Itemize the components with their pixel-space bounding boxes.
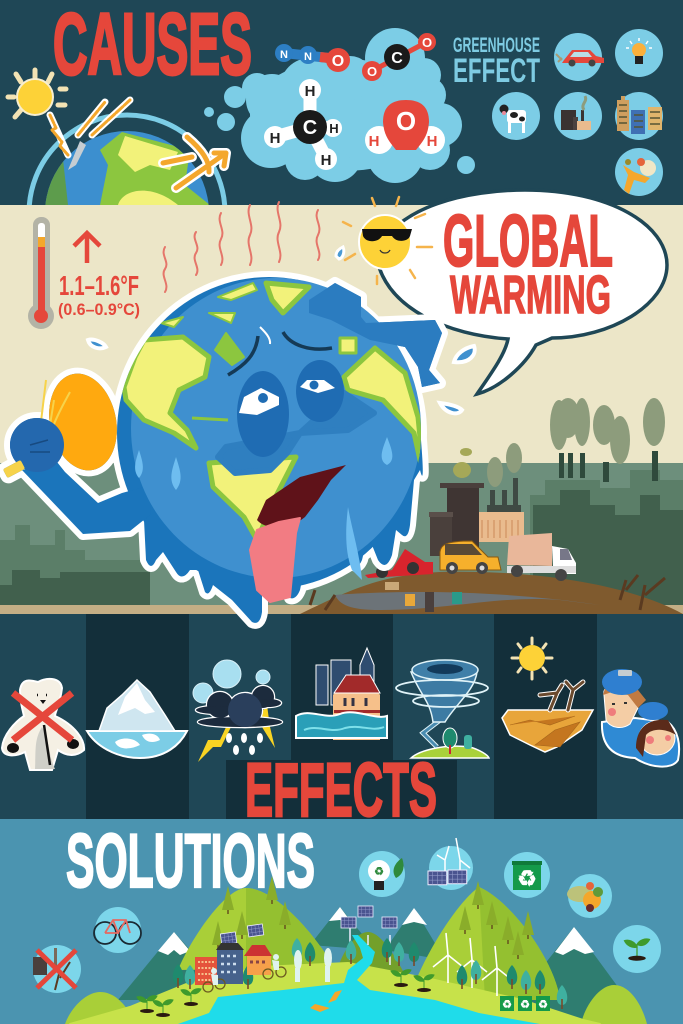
molecule: nitrous oxide: O <box>332 53 344 70</box>
molecule: water <box>365 100 445 154</box>
distant factories and smoke <box>453 398 665 487</box>
hills <box>65 887 647 1024</box>
molecule: water: H <box>427 133 437 150</box>
icon: eco bulb <box>359 851 405 897</box>
recycling bins <box>500 996 550 1011</box>
icon: food <box>567 874 612 918</box>
icon: reflected heat arrows <box>163 137 226 188</box>
fish <box>310 990 342 1012</box>
mountains <box>118 907 640 1024</box>
molecule: carbon dioxide <box>362 33 436 81</box>
icon: second solar panel <box>448 870 467 884</box>
text: temperature rise <box>58 270 140 319</box>
icon: thermometer <box>28 217 54 329</box>
sweat drops around earth <box>88 340 475 413</box>
icon: city buildings <box>615 92 663 140</box>
recycling bins: ♻ <box>520 999 530 1011</box>
icon: light bulb <box>615 29 663 77</box>
sweat on earth <box>135 437 392 580</box>
trees <box>173 938 567 1009</box>
icon: recycling bin: ♻ <box>517 866 537 891</box>
panel: solutions background <box>0 819 683 1024</box>
icon: recycling bin <box>504 852 550 898</box>
recycling bins: ♻ <box>538 999 548 1011</box>
molecule: methane: H <box>305 83 315 100</box>
right arm shade <box>309 283 442 387</box>
effect: storm <box>193 660 282 762</box>
panel: global warming sky <box>0 205 683 465</box>
solar panels <box>220 906 398 965</box>
icon: seedling <box>613 925 661 973</box>
effect: sick people <box>602 669 679 767</box>
icon: food and hand <box>615 148 663 196</box>
seedlings <box>137 970 434 1017</box>
heading: greenhouse effect <box>453 34 540 90</box>
left hand with fan <box>3 367 125 478</box>
effect: drought <box>502 638 593 752</box>
recycling bins: ♻ <box>502 999 512 1011</box>
molecule: nitrous oxide: N <box>304 51 312 63</box>
illustration: factory and vehicles on mound <box>300 478 683 614</box>
earth mouth <box>257 465 346 527</box>
molecule: methane: H <box>270 130 280 147</box>
panel: effects background stripes <box>0 614 683 819</box>
icon: car <box>554 33 604 81</box>
icon: up arrow <box>74 233 100 263</box>
panel: causes background <box>0 0 683 205</box>
icon: bicycle <box>94 907 141 953</box>
heading: greenhouse effect: EFFECT <box>453 52 540 90</box>
molecule: methane: C <box>303 117 317 139</box>
molecule: nitrous oxide: N <box>280 49 288 61</box>
text: temperature rise: (0.6–0.9°C) <box>58 300 140 319</box>
ground <box>70 963 600 1024</box>
molecule: water: H <box>369 133 379 150</box>
molecule: nitrous oxide <box>275 44 350 72</box>
text: temperature rise: 1.1–1.6°F <box>59 270 139 301</box>
heading: solutions: SOLUTIONS <box>66 819 315 904</box>
heading box: effects: EFFECTS <box>245 748 437 833</box>
earth face <box>218 327 374 473</box>
illustration: small earth with atmosphere <box>26 112 228 205</box>
molecule: methane: H <box>329 121 339 136</box>
earth outline and silhouette <box>3 277 442 623</box>
effect: polar bear crossed out <box>2 679 84 770</box>
speech bubble: global warming <box>376 190 667 394</box>
illustration: green landscape <box>65 876 647 1024</box>
heading box: effects <box>226 748 457 833</box>
cyclists and walkers <box>203 948 332 992</box>
town buildings <box>195 943 272 985</box>
illustration: melting earth character <box>3 277 442 623</box>
icon: cow <box>492 92 540 140</box>
molecule: carbon dioxide: C <box>391 50 403 67</box>
river and lake <box>178 935 540 1024</box>
effect: flood <box>296 648 387 740</box>
icon: sun with sunglasses <box>336 197 432 284</box>
heading: greenhouse effect: GREENHOUSE <box>453 34 540 57</box>
molecule: methane <box>264 79 342 170</box>
icon: sun with rays hitting earth <box>8 70 130 170</box>
effect: iceberg <box>87 680 187 758</box>
wind turbines <box>433 933 512 996</box>
panel: polluted ground <box>0 463 683 614</box>
icon: eco bulb: ♻ <box>374 866 384 878</box>
molecule: carbon dioxide: O <box>422 35 432 50</box>
molecule: carbon dioxide: O <box>367 64 377 79</box>
earth ocean and continents <box>124 278 424 580</box>
earth tongue <box>250 518 300 602</box>
heat waves <box>164 202 319 292</box>
icon: renewable energy <box>428 838 473 890</box>
icon: factory <box>554 92 602 140</box>
illustration: greenhouse gas cloud <box>204 28 475 183</box>
molecule: water: O <box>396 106 416 136</box>
icon: no factories <box>33 945 81 993</box>
molecule: methane: H <box>321 152 331 169</box>
effect: tornado <box>396 660 489 758</box>
pines <box>212 876 534 959</box>
